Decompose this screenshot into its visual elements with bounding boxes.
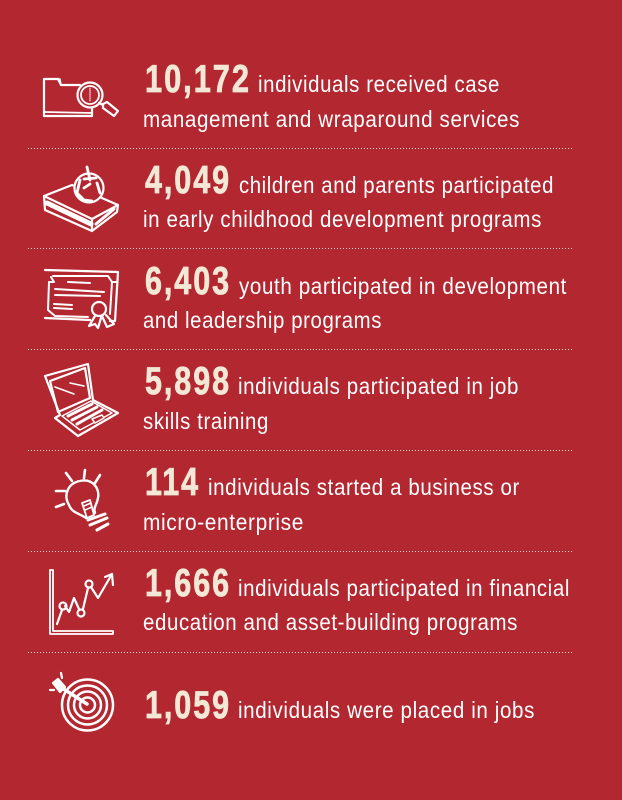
statistic: 114: 114	[145, 461, 200, 504]
description: youth leadership: youth participated in development	[239, 273, 567, 299]
description: financial education: individuals participated in financial	[238, 575, 570, 601]
description: early childhood: children and parents participated	[239, 172, 554, 198]
description: job placement: individuals were placed in jobs	[238, 697, 535, 723]
icon: folder with magnifying glass	[44, 79, 118, 116]
description: early childhood	[143, 172, 554, 232]
description: financial education: education and asset-building programs	[143, 609, 518, 635]
row: case management	[44, 58, 520, 132]
icon: certificate with ribbon	[45, 270, 118, 328]
description: micro-enterprise: individuals started a business or	[208, 474, 520, 500]
description: job skills: skills training	[143, 408, 269, 434]
statistic: 5,898: 5,898	[145, 360, 231, 403]
description: case management: individuals received case	[258, 71, 500, 97]
statistic: 10,172: 10,172	[145, 58, 251, 101]
description: job skills: individuals participated in job	[238, 373, 519, 399]
row: early childhood	[44, 159, 554, 232]
description: youth leadership	[143, 273, 567, 333]
icon: laptop	[45, 364, 118, 436]
description: youth leadership: and leadership programs	[143, 307, 382, 333]
description: job skills	[143, 373, 519, 434]
icon: line chart	[50, 570, 113, 634]
description: financial education	[143, 575, 570, 635]
row: youth leadership	[45, 260, 567, 333]
row: job skills	[45, 360, 519, 436]
description: case management: management and wraparound services	[143, 106, 520, 132]
statistic: 4,049: 4,049	[145, 159, 231, 202]
description: micro-enterprise	[143, 474, 520, 535]
description: case management	[143, 71, 520, 132]
icon: apple on book	[44, 167, 118, 231]
row: job placement	[50, 673, 535, 730]
icon: light bulb	[56, 470, 108, 530]
statistic: 1,666: 1,666	[145, 562, 231, 605]
description: micro-enterprise: micro-enterprise	[143, 509, 304, 535]
row: micro-enterprise	[56, 461, 520, 535]
statistic: 6,403: 6,403	[145, 260, 231, 303]
icon: target with dart	[50, 673, 113, 730]
statistic: 1,059: 1,059	[145, 684, 231, 727]
row: financial education	[50, 562, 570, 635]
description: early childhood: in early childhood development programs	[143, 206, 542, 232]
